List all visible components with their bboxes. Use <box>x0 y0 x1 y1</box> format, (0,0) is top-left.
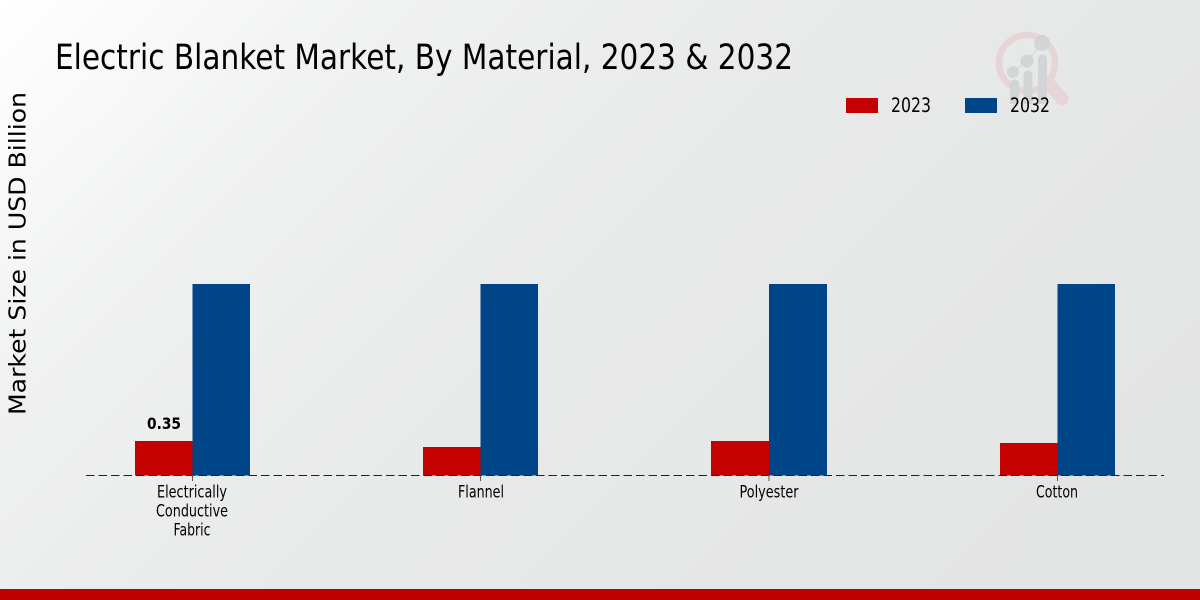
bars: Cotton <box>1000 284 1115 476</box>
bars: Flannel <box>423 284 538 476</box>
bar chart <box>86 284 1164 540</box>
bars: Polyester <box>711 284 827 476</box>
legend swatch 2023 <box>846 98 878 113</box>
legend <box>846 94 1050 117</box>
bars: Electrically Conductive Fabric <box>135 284 250 476</box>
category label: Cotton: Cotton <box>1036 482 1078 502</box>
category label: Polyester: Polyester <box>740 482 799 502</box>
watermark logo icon <box>999 35 1062 104</box>
category label: Electrically Conductive Fabric: Fabric <box>174 520 210 540</box>
data label 0.35: 0.35 <box>147 414 181 433</box>
category label: Flannel: Flannel <box>458 482 504 502</box>
legend swatch 2032 <box>965 98 997 113</box>
category label: Electrically Conductive Fabric <box>156 482 228 540</box>
category label: Electrically Conductive Fabric: Conductive <box>156 502 228 522</box>
bottom red band <box>0 589 1200 600</box>
category label: Electrically Conductive Fabric: Electrically <box>157 482 227 502</box>
title: Electric Blanket Market, By Material, 2023 & 2032 <box>55 38 793 78</box>
legend label 2023: 2023 <box>891 94 931 117</box>
x-axis ticks <box>192 475 1058 481</box>
legend label 2032: 2032 <box>1010 94 1050 117</box>
x-axis baseline <box>86 474 1164 476</box>
y-axis label: Market Size in USD Billion <box>6 92 32 415</box>
